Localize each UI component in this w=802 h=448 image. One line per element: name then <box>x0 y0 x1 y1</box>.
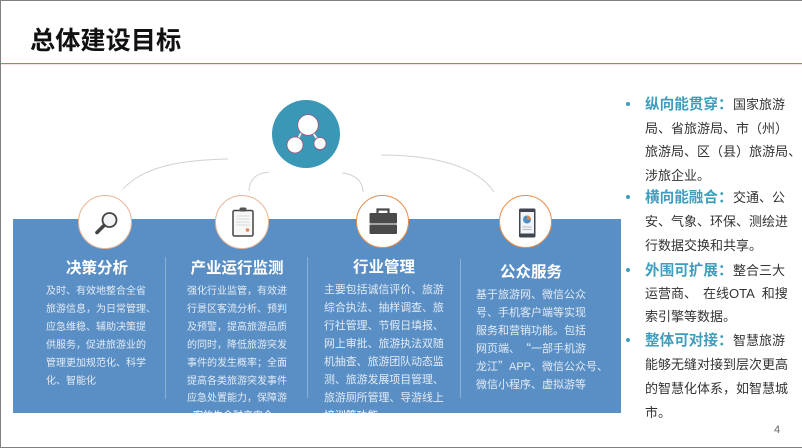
text: overall connection: 能够无缝对接到层次更高 <box>645 357 788 372</box>
bullet: vertical integration <box>626 102 630 106</box>
text: industry monitoring: 行景区客流分析、预判 <box>187 304 287 315</box>
text: public services: 网页端、 一部手机游 <box>476 343 586 355</box>
text: industry management: 网上审批、旅游执法双随 <box>324 338 444 350</box>
column dividers <box>165 257 166 399</box>
text: industry management: 综合执法、抽样调查、旅 <box>324 302 444 314</box>
text: industry management <box>324 284 444 422</box>
text: public services: 号、手机客户端等实现 <box>476 307 586 319</box>
text: industry monitoring: 的同时，降低旅游突发 <box>187 336 287 351</box>
text: industry management: 旅游厕所管理、导游线上 <box>324 392 444 404</box>
text: industry management: 主要包括诚信评价、旅游 <box>324 284 444 296</box>
text: industry monitoring: 提高各类旅游突发事件 <box>187 376 287 387</box>
text: industry monitoring: 事件的发生概率；全面 <box>187 354 287 369</box>
text: external expansion: 外围可扩展：整合三大 <box>645 259 785 280</box>
heading: industry monitoring: 产业运行监测 <box>190 260 284 277</box>
text: public services <box>476 288 608 391</box>
text: decision analysis: 化、智能化 <box>46 376 96 387</box>
central hub icon <box>272 100 340 168</box>
text: external expansion <box>645 259 788 324</box>
text: industry management: 测、旅游发展项目管理、 <box>324 374 444 386</box>
blue panel <box>12 219 621 413</box>
text: horizontal fusion: 横向能融合：交通、公 <box>645 186 785 207</box>
text: vertical integration: 局、省旅游局、市（州） <box>645 118 788 137</box>
text: vertical integration: 涉旅企业。 <box>645 168 710 183</box>
bullet: overall connection <box>626 338 630 342</box>
text: industry monitoring: 客的生命财产安全 <box>193 411 273 422</box>
text: public services: 基于旅游网、微信公众 <box>476 289 586 301</box>
text: horizontal fusion: 行数据交换和共享。 <box>645 238 762 253</box>
heading: decision analysis: 决策分析 <box>66 260 128 277</box>
bullet: external expansion <box>626 268 630 272</box>
text: industry management: 机抽查、旅游团队动态监 <box>324 356 444 368</box>
heading: industry management: 行业管理 <box>353 259 415 276</box>
text: industry monitoring: 应急处置能力，保障游 <box>187 389 287 404</box>
text: decision analysis <box>46 285 156 387</box>
title: 总体建设目标 <box>30 27 181 55</box>
text: industry monitoring: 及预警，提高旅游品质 <box>187 318 287 333</box>
text: public services: “ <box>520 340 531 356</box>
text: decision analysis: 旅游信息，为日常管理、 <box>46 300 156 315</box>
text: decision analysis: 应急维稳、辅助决策提 <box>46 322 146 333</box>
text: decision analysis: 供服务，促进旅游业的 <box>46 336 146 351</box>
icon: smartphone <box>499 195 552 248</box>
text: horizontal fusion <box>645 186 788 253</box>
text: public services: 微信小程序、虚拟游等 <box>476 379 586 391</box>
text: public services: 服务和营销功能。包括 <box>476 325 586 337</box>
text: external expansion: 索引擎等数据。 <box>645 309 736 324</box>
text: industry monitoring <box>187 282 287 422</box>
text: vertical integration: 旅游局、区（县）旅游局、 <box>645 141 801 160</box>
text: overall connection: 的智慧化体系，如智慧城 <box>645 378 788 397</box>
text: public services: 龙江”APP、微信公众号、 <box>476 358 608 374</box>
text: external expansion: 运营商、 在线OTA 和搜 <box>645 286 788 301</box>
text: industry management: 行社管理、节假日填报、 <box>324 320 444 332</box>
bullet: horizontal fusion <box>626 195 630 199</box>
text: industry monitoring: 强化行业监管，有效进 <box>187 282 287 297</box>
text: industry management: 培训等功能 <box>324 410 378 422</box>
text: vertical integration <box>645 93 801 183</box>
text: horizontal fusion: 安、气象、环保、测绘进 <box>645 214 788 229</box>
page number: 4 <box>774 424 780 436</box>
text: decision analysis: 及时、有效地整合全省 <box>46 286 146 297</box>
text: decision analysis: 管理更加规范化、科学 <box>46 358 146 369</box>
heading: public services: 公众服务 <box>500 264 562 281</box>
text: overall connection: 整体可对接：智慧旅游 <box>645 329 785 350</box>
icon: briefcase <box>356 195 408 248</box>
text: overall connection <box>645 329 788 420</box>
text: overall connection: 市。 <box>645 405 671 420</box>
title rule <box>1 63 802 65</box>
icon: magnifier <box>78 195 132 249</box>
icon: clipboard <box>214 195 268 249</box>
text: vertical integration: 纵向能贯穿：国家旅游 <box>645 93 785 114</box>
